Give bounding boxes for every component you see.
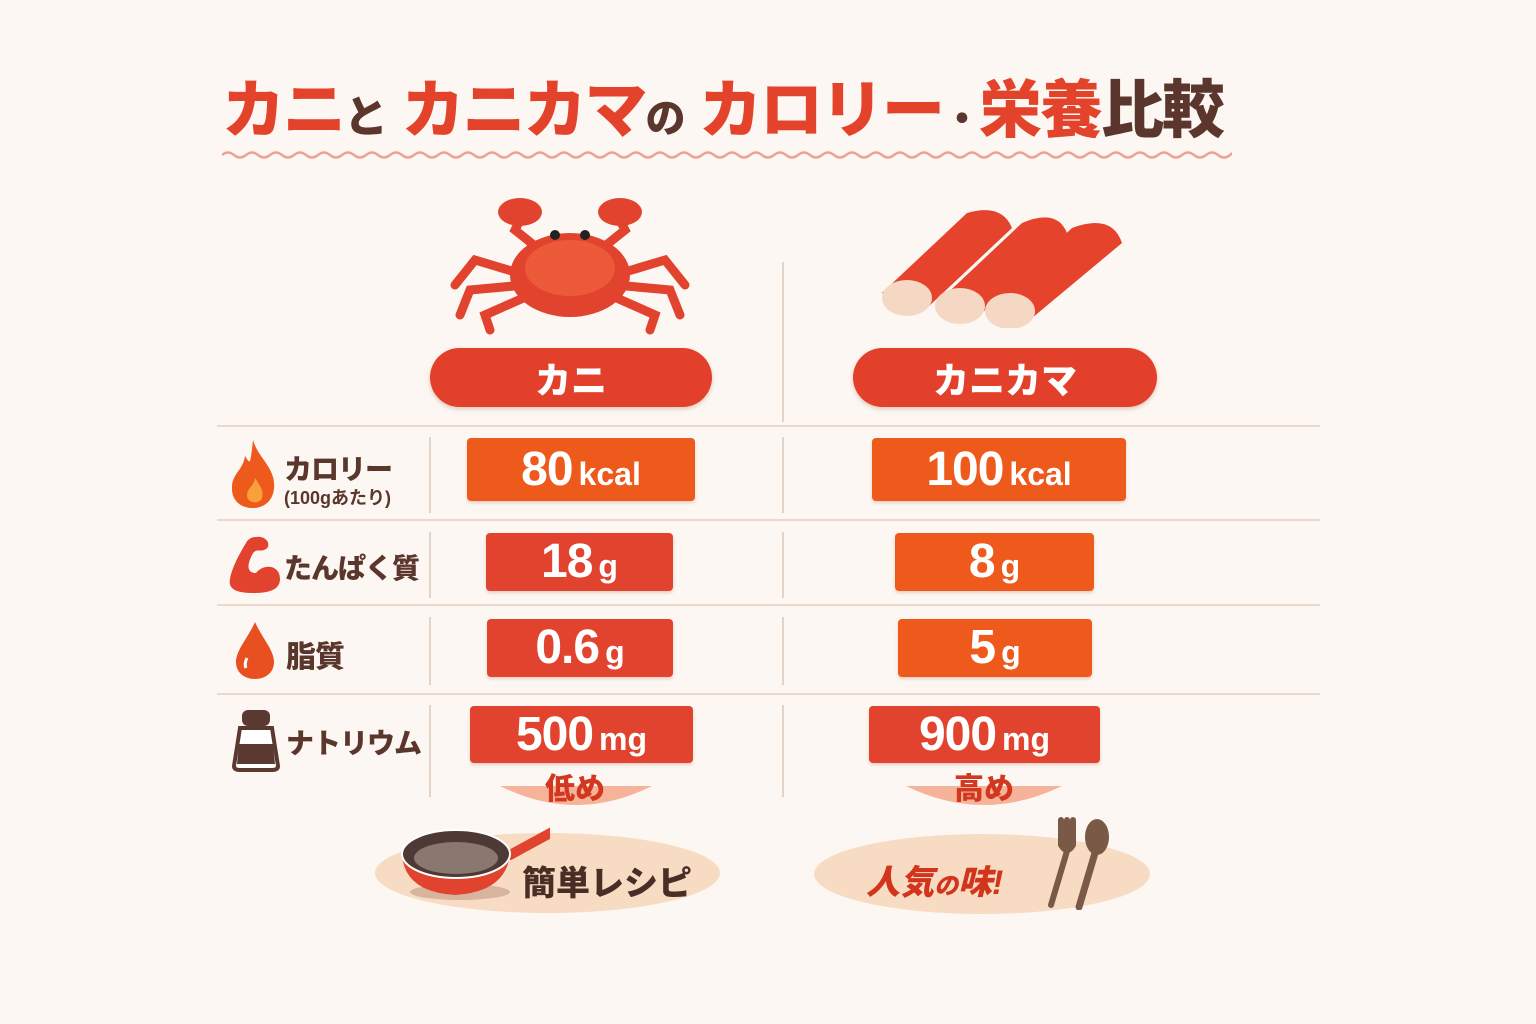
text: mg [599, 721, 647, 757]
title: カニと カニカマの カロリー・栄養比較 [222, 76, 1223, 146]
text: 5 [969, 621, 995, 674]
pill: カニカマ: カニカマ [933, 360, 1077, 400]
icon: fork and spoon [1048, 817, 1109, 910]
wavy underline [222, 151, 1232, 159]
text: g [1001, 548, 1020, 584]
values: カニカマ: kcal [1009, 456, 1072, 492]
text: 0.6 [535, 621, 599, 674]
values: カニ: kcal [579, 456, 641, 492]
text: g [1001, 634, 1021, 670]
badge: 簡単レシピ [375, 828, 720, 913]
row label: sodium [232, 710, 421, 772]
values: カニカマ [872, 438, 1126, 501]
icon: flame [232, 440, 274, 508]
row label: calories: カロリー [284, 454, 392, 485]
row label: fat: 脂質 [286, 641, 344, 674]
values: カニ [467, 438, 695, 501]
values: カニカマ: 100 [926, 443, 1003, 496]
icon: muscle [230, 536, 280, 593]
note: 低め [500, 773, 652, 806]
note: 低め: 低め [545, 773, 605, 806]
row label: protein: たんぱく質 [284, 553, 419, 584]
note: 高め: 高め [954, 773, 1014, 806]
icon: drop [236, 622, 274, 679]
text: 900 [919, 708, 996, 761]
badge: 簡単レシピ: 簡単レシピ [522, 865, 692, 903]
pill: カニ [430, 348, 712, 407]
row label: calories: (100gあたり) [284, 488, 391, 508]
icon: crab sticks [882, 210, 1122, 328]
values: カニ: 80 [521, 443, 573, 496]
row label: sodium: ナトリウム [286, 728, 421, 759]
text: 500 [516, 708, 593, 761]
row label: calories [232, 440, 392, 508]
pill: カニカマ [853, 348, 1157, 407]
icon: salt shaker [232, 710, 280, 772]
badge: 人気の味! [814, 817, 1150, 914]
note: 高め [906, 773, 1062, 806]
text: 18 [541, 535, 592, 588]
badge: 人気の味!: 人気の味! [866, 864, 1003, 902]
pill: カニ: カニ [535, 360, 607, 400]
row label: protein [230, 536, 419, 593]
text: g [598, 548, 618, 584]
row label: fat [236, 622, 344, 679]
icon: crab [450, 198, 690, 334]
text: g [605, 634, 625, 670]
icon: pan [401, 828, 550, 900]
text: mg [1002, 721, 1050, 757]
text: 8 [969, 535, 995, 588]
